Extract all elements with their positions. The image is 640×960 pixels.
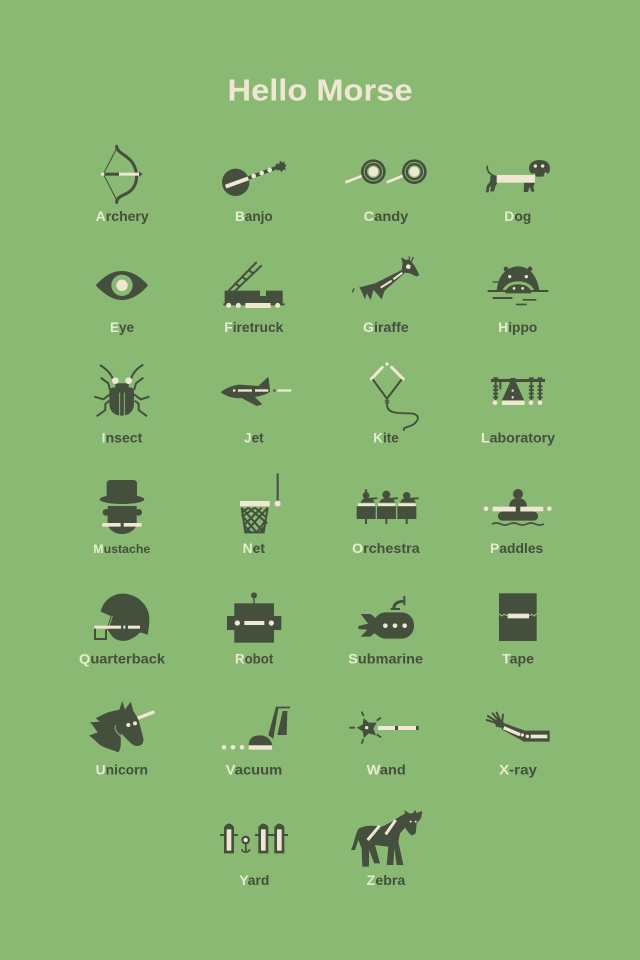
icon: robot head	[227, 592, 281, 643]
item: Candy	[345, 159, 427, 224]
item: Quarterback	[79, 594, 166, 666]
icon: man with top hat and mustache	[100, 480, 144, 534]
icon: torn tape	[499, 593, 537, 641]
label: Kite	[373, 430, 399, 446]
label: Mustache	[93, 543, 151, 556]
icon: magic wand	[349, 712, 419, 744]
label: Tape	[502, 652, 534, 666]
icon: lollipops	[345, 159, 427, 184]
icon: beetle	[94, 365, 149, 416]
item: Banjo	[222, 161, 287, 224]
icon: dachshund	[486, 160, 550, 192]
item: Firetruck	[223, 262, 285, 335]
item: Unicorn	[89, 701, 154, 778]
item: Archery	[96, 146, 149, 224]
label: Quarterback	[79, 652, 166, 666]
item: Kite	[371, 362, 418, 446]
icon: football helmet	[94, 594, 149, 641]
icon: basketball hoop	[240, 473, 281, 532]
item: Submarine	[348, 596, 423, 666]
icon: kite	[371, 362, 418, 430]
item: Tape	[499, 593, 537, 666]
item: Insect	[94, 365, 149, 446]
item: Net	[240, 473, 281, 556]
item: Eye	[96, 271, 148, 335]
item: X-ray	[487, 713, 550, 778]
icon: giraffe	[352, 256, 419, 300]
icon: bow and arrow	[101, 146, 143, 202]
label: Eye	[110, 320, 134, 335]
icon: jet plane	[221, 377, 291, 406]
item: Mustache	[93, 480, 151, 556]
label: Archery	[96, 209, 149, 224]
label: Submarine	[348, 652, 423, 666]
item: Dog	[486, 160, 550, 224]
label: X-ray	[499, 762, 538, 778]
item: Robot	[227, 592, 281, 666]
icon: fire truck	[223, 262, 285, 308]
label: Unicorn	[96, 762, 148, 778]
label: Robot	[235, 652, 274, 666]
item: Zebra	[351, 810, 422, 888]
icon: unicorn head	[89, 701, 154, 752]
label: Firetruck	[224, 320, 284, 335]
icon: vacuum cleaner	[222, 707, 290, 750]
label: Laboratory	[481, 430, 556, 446]
icon: zebra	[351, 810, 422, 867]
item: Orchestra	[352, 489, 420, 556]
label: Orchestra	[352, 541, 420, 556]
item: Vacuum	[222, 707, 290, 778]
item: Yard	[220, 823, 288, 888]
icon: eye	[96, 271, 148, 300]
label: Wand	[367, 762, 406, 778]
label: Paddles	[490, 541, 543, 556]
label: Vacuum	[226, 762, 282, 778]
item: Hippo	[488, 266, 548, 335]
item: Paddles	[484, 489, 552, 556]
icon: submarine	[358, 596, 414, 639]
label: Yard	[239, 873, 269, 888]
icon: three musicians at stands	[357, 489, 419, 524]
label: Jet	[244, 430, 264, 446]
item: Laboratory	[481, 377, 556, 446]
label: Hippo	[498, 320, 537, 335]
icon: arm x-ray	[487, 713, 550, 742]
item: Wand	[349, 712, 419, 778]
label: Dog	[504, 209, 531, 224]
label: Insect	[102, 430, 143, 446]
icon: hippo	[488, 266, 548, 305]
label: Banjo	[235, 209, 273, 224]
label: Net	[243, 541, 266, 556]
icon: fence and flower	[220, 823, 288, 853]
title: Hello Morse	[228, 72, 412, 108]
icon: banjo	[222, 161, 287, 196]
item: Giraffe	[352, 256, 419, 335]
item: Jet	[221, 377, 291, 446]
label: Zebra	[367, 873, 406, 888]
icon: lab equipment	[491, 377, 545, 405]
label: Giraffe	[363, 320, 409, 335]
label: Candy	[364, 209, 409, 224]
icon: person in raft with paddle	[484, 489, 552, 525]
